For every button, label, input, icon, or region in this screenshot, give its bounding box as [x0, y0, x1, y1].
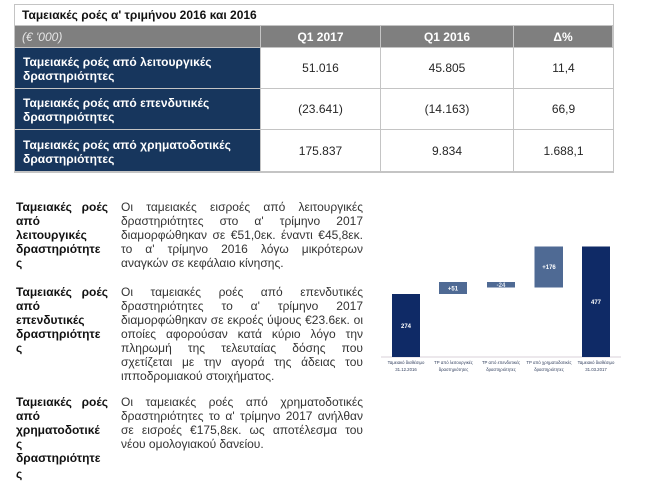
- header: change percent: Δ%: [553, 30, 573, 44]
- text: investing: δραστηριότητες το α' τρίμηνο 2017: [121, 299, 363, 313]
- panel: cash flow table: [14, 4, 614, 173]
- table title: Ταμειακές ροές α' τριμήνου 2016 και 2016: [22, 8, 257, 22]
- text: operating: δραστηριότητες στο α' τρίμηνο 2017: [121, 214, 363, 228]
- value: investing Q1 2017: (23.641): [298, 102, 343, 116]
- bar: financing +176: +176: [542, 265, 556, 271]
- header: change percent: [514, 26, 612, 47]
- axis label: closing balance: Ταμειακό διαθέσιμο: [578, 360, 615, 365]
- text: investing: ιπποδρομιακού στοιχήματος.: [121, 369, 274, 383]
- heading: operating: λειτουργικές: [16, 228, 87, 242]
- text: operating: το α' τρίμηνο 2016 λόγω μικρότερων: [121, 242, 363, 256]
- axis label: closing balance: 31.03.2017: [585, 367, 607, 372]
- header: Q1 2017: [261, 26, 380, 47]
- value: investing Q1 2016: (14.163): [425, 102, 469, 116]
- value: investing Q1 2017: [261, 89, 380, 129]
- axis label: opening balance: Ταμειακό διαθέσιμο: [388, 360, 425, 365]
- value: operating Q1 2017: 51.016: [302, 61, 339, 75]
- value: investing change: 66,9: [552, 102, 575, 116]
- heading: investing: επενδυτικές: [16, 313, 85, 327]
- text: operating: [121, 200, 363, 270]
- text: financing: [121, 395, 363, 451]
- heading: financing: ς: [16, 437, 22, 451]
- axis label: closing balance: [578, 360, 615, 372]
- value: operating change: [514, 48, 613, 88]
- value: investing Q1 2016: [381, 89, 513, 129]
- value: financing Q1 2016: 9.834: [432, 144, 462, 158]
- text: investing: διαμορφώθηκαν σε εκροές ύψους €23.6εκ. οι: [121, 313, 363, 327]
- waterfall chart: [381, 246, 621, 372]
- row label: financing: δραστηριότητες: [23, 152, 114, 166]
- heading: financing: ς: [16, 467, 22, 481]
- text: financing: Οι ταμειακές ροές από χρηματοδοτικές: [121, 395, 363, 409]
- text: investing: οποίες αφορούσαν κατά κύριο λόγο την: [121, 327, 363, 341]
- axis label: investing: δραστηριότητες: [486, 367, 516, 372]
- value: financing change: 1.688,1: [543, 144, 584, 158]
- text: investing: σχετίζεται με την αγορά της άδειας του: [121, 355, 363, 369]
- row label: investing: [15, 89, 260, 129]
- row label: operating: Ταμειακές ροές από λειτουργικές: [23, 55, 212, 69]
- heading: operating: [16, 200, 108, 270]
- row label: operating: δραστηριότητες: [23, 69, 114, 83]
- heading: investing: Ταμειακές ροές: [16, 285, 108, 299]
- text: operating: διαμορφώθηκαν σε €51,0εκ. έναντι €45,8εκ.: [121, 228, 363, 242]
- value: financing Q1 2017: 175.837: [299, 144, 342, 158]
- bar: operating +51: [439, 282, 467, 294]
- header: unit: (€ '000): [22, 30, 62, 44]
- bar: opening balance: 274: [401, 324, 412, 330]
- bar: closing balance: 477: [591, 300, 602, 306]
- bar: financing +176: [534, 246, 563, 288]
- value: operating Q1 2016: 45.805: [429, 61, 465, 75]
- axis label: operating: ΤΡ από λειτουργικές: [434, 360, 473, 365]
- bar: investing -24: -24: [497, 283, 506, 289]
- axis label: opening balance: 31.12.2016: [395, 367, 417, 372]
- axis label: investing: ΤΡ από επενδυτικές: [482, 360, 520, 365]
- axis label: operating: [434, 360, 473, 372]
- header: Q1 2016: Q1 2016: [424, 30, 470, 44]
- heading: operating: Ταμειακές ροές: [16, 200, 108, 214]
- heading: financing: δραστηριότητε: [16, 451, 100, 465]
- bar: closing balance: [582, 246, 610, 357]
- heading: operating: δραστηριότητε: [16, 242, 100, 256]
- row label: financing: [15, 130, 260, 171]
- text: investing: [121, 285, 363, 383]
- axis label: financing: δραστηριότητες: [534, 367, 564, 372]
- text: financing: δραστηριότητες το α' τρίμηνο 2017 ανήλθαν: [121, 409, 363, 423]
- text: financing: σε εισροές €175,8εκ. ως αποτέλεσμα του: [121, 423, 363, 437]
- value: financing Q1 2017: [261, 130, 380, 171]
- value: financing change: [514, 130, 613, 171]
- header: Q1 2017: Q1 2017: [297, 30, 344, 44]
- bar: investing -24: [487, 282, 515, 289]
- heading: investing: ς: [16, 341, 22, 355]
- axis label: investing: [482, 360, 520, 372]
- text: operating: Οι ταμειακές εισροές από λειτουργικές: [121, 200, 363, 214]
- value: operating Q1 2016: [381, 48, 513, 88]
- header: Q1 2016: [381, 26, 513, 47]
- heading: operating: από: [16, 214, 40, 228]
- row label: investing: δραστηριότητες: [23, 110, 114, 124]
- row label: operating: [15, 48, 260, 88]
- heading: investing: από: [16, 299, 40, 313]
- bar: opening balance: [392, 294, 420, 357]
- heading: operating: ς: [16, 256, 22, 270]
- header: unit: [15, 26, 260, 47]
- bar: operating +51: +51: [448, 286, 459, 292]
- value: operating change: 11,4: [552, 61, 575, 75]
- axis label: opening balance: [388, 360, 425, 372]
- row label: investing: Ταμειακές ροές από επενδυτικές: [23, 96, 209, 110]
- table title: [15, 5, 613, 25]
- text: investing: πληρωμή της τελευταίας δόσης που: [121, 341, 363, 355]
- heading: financing: από: [16, 409, 40, 423]
- axis label: financing: [526, 360, 572, 372]
- axis label: operating: δραστηριότητες: [439, 367, 468, 372]
- row label: financing: Ταμειακές ροές από χρηματοδοτικές: [23, 138, 231, 152]
- value: operating Q1 2017: [261, 48, 380, 88]
- text: financing: νέου ομολογιακού δανείου.: [121, 437, 264, 451]
- heading: financing: [16, 395, 108, 481]
- value: investing change: [514, 89, 613, 129]
- axis label: financing: ΤΡ από χρηματοδοτικές: [526, 360, 572, 365]
- heading: financing: χρηματοδοτικέ: [16, 423, 100, 437]
- text: operating: αναγκών σε κεφάλαιο κίνησης.: [121, 256, 284, 270]
- heading: financing: Ταμειακές ροές: [16, 395, 108, 409]
- value: financing Q1 2016: [381, 130, 513, 171]
- text: investing: Οι ταμειακές ροές από επενδυτικές: [121, 285, 363, 299]
- heading: investing: δραστηριότητε: [16, 327, 100, 341]
- heading: investing: [16, 285, 108, 355]
